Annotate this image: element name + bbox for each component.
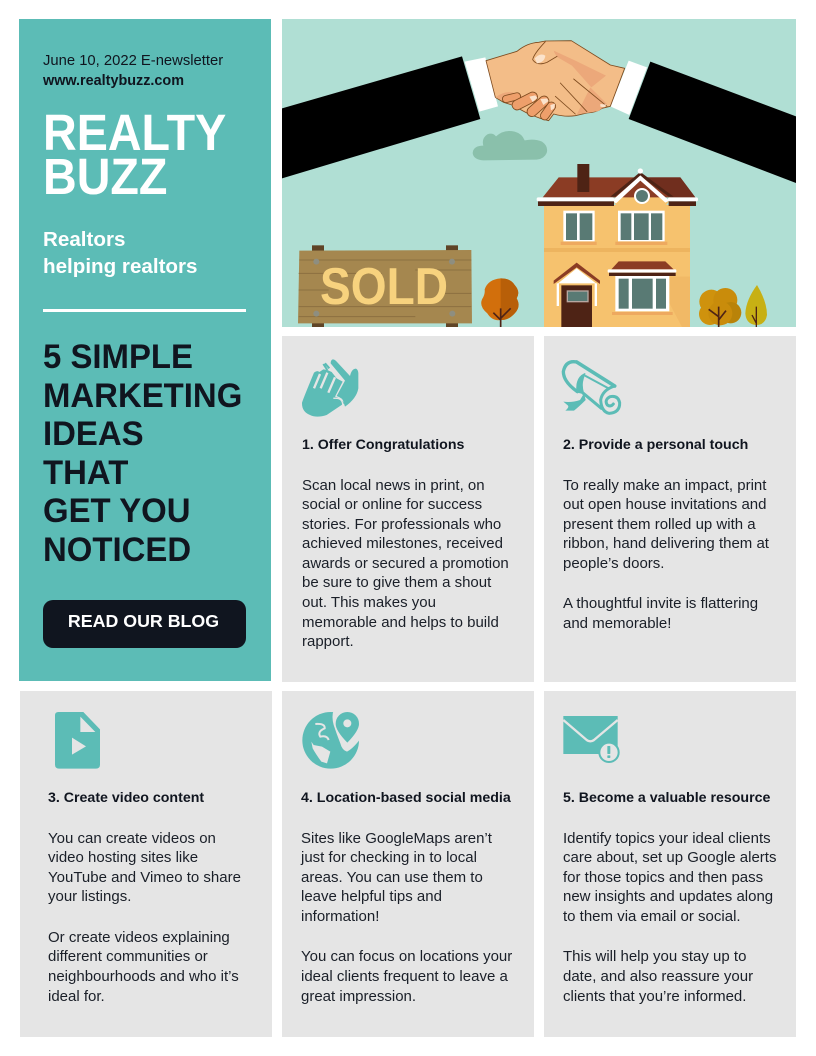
tip body text: social or online for success [302,496,482,513]
panel: tip 3 video content [20,691,272,1037]
heading: 5 simple marketing ideas: THAT [43,454,128,492]
tip body text: and memorable! [563,615,671,632]
orange tree [481,278,519,327]
tip body text: information! [301,908,379,925]
icon: globe with map pin [302,712,359,769]
tip body text: people’s doors. [563,555,664,572]
tip body text: out open house invitations and [563,496,766,513]
tip body text: your listings. [48,888,131,905]
tip body text: ideal clients frequent to leave a [301,968,508,985]
tip body text: awards or secured a promotion [302,555,509,572]
panel: tip 2 personal touch [544,336,796,682]
tip heading: 1. Offer Congratulations [302,437,464,453]
tip body text [300,830,512,1005]
panel: tip 5 valuable resource [544,691,796,1037]
tip body text: out. This makes you [302,594,436,611]
tip body text: be sure to give them a shout [302,574,491,591]
tip body text: neighbourhoods and who it’s [48,968,239,985]
icon: envelope with alert [563,716,620,763]
tagline [43,228,197,278]
icon: video file [55,712,100,769]
tip heading: 3. Create video content [48,790,204,806]
tip body text: This will help you stay up to [563,948,746,965]
tip body text: Identify topics your ideal clients [563,830,771,846]
tip heading: 4. Location-based social media [301,790,511,806]
title [43,104,226,205]
icon: clapping hands [302,359,358,417]
tip body text: areas. You can use them to [301,869,483,886]
right sleeve [629,62,796,183]
sold sign: SOLD [320,257,448,315]
tagline: helping realtors [43,255,197,278]
tip body text [563,830,776,1005]
sold sign [298,245,472,327]
panel: tip 4 location-based social media [282,691,534,1037]
tip body text: YouTube and Vimeo to share [48,869,241,886]
panel: tip 1 offer congratulations [282,336,534,682]
tip body text: to them via email or social. [563,908,741,925]
tip body text: To really make an impact, print [563,476,766,494]
tip body text: ideal for. [48,988,105,1005]
tip body text: Or create videos explaining [48,929,230,946]
tip body text: rapport. [302,633,354,650]
tip body text: Scan local news in print, on [302,476,485,494]
tip body text: Sites like GoogleMaps aren’t [301,830,492,846]
tip body text: care about, set up Google alerts [563,849,776,866]
tip heading: 5. Become a valuable resource [563,790,770,806]
tip body text: for those topics and then pass [563,869,763,886]
tip body text: achieved milestones, received [302,535,503,552]
house [537,164,698,327]
handshake [486,41,625,121]
tagline: Realtors [43,228,125,251]
heading: 5 simple marketing ideas: IDEAS [43,415,144,453]
tip body text [563,476,769,632]
heading: 5 simple marketing ideas [43,338,242,568]
right cuff [610,61,647,115]
title: BUZZ [43,148,167,205]
newsletter date and website [43,53,223,88]
left sleeve [282,56,480,178]
icon: cloud [473,131,547,160]
golden tree [699,288,741,327]
newsletter date and website: www.realtybuzz.com [43,72,184,88]
icon: rolled scroll [562,360,622,415]
tip body text [302,476,509,650]
tip body text: memorable and helps to build [302,614,499,631]
button: read our blog [43,600,246,648]
heading: 5 simple marketing ideas: NOTICED [43,530,191,568]
tip body text: new insights and updates along [563,888,773,905]
divider [43,309,246,312]
tip body text: You can create videos on [48,830,216,846]
tip body text: date, and also reassure your [563,968,753,985]
title: REALTY [43,104,226,161]
tip body text: great impression. [301,988,416,1005]
heading: 5 simple marketing ideas: MARKETING [43,376,242,414]
tip body text: A thoughtful invite is flattering [563,595,758,612]
tip body text: stories. For professionals who [302,516,501,533]
panel: masthead sidebar [19,19,271,681]
tip body text: present them rolled up with a [563,516,756,533]
heading: 5 simple marketing ideas: GET YOU [43,492,191,530]
button: read our blog: READ OUR BLOG [68,611,219,631]
tip body text: clients that you’re informed. [563,988,746,1005]
yellow leaf tree [745,285,767,327]
tip body text: ribbon, hand delivering them at [563,535,769,552]
illustration: handshake over sold house [282,19,796,327]
tip body text: just for checking in to local [301,849,477,866]
tip body text: leave helpful tips and [301,888,442,905]
tip heading: 2. Provide a personal touch [563,437,748,453]
tip body text: different communities or [48,948,208,965]
heading: 5 simple marketing ideas: 5 SIMPLE [43,338,193,376]
newsletter date and website: June 10, 2022 E-newsletter [43,53,223,69]
left cuff [465,57,498,112]
tip body text: video hosting sites like [48,849,198,866]
tip body text [48,830,241,1005]
tip body text: You can focus on locations your [301,948,512,965]
